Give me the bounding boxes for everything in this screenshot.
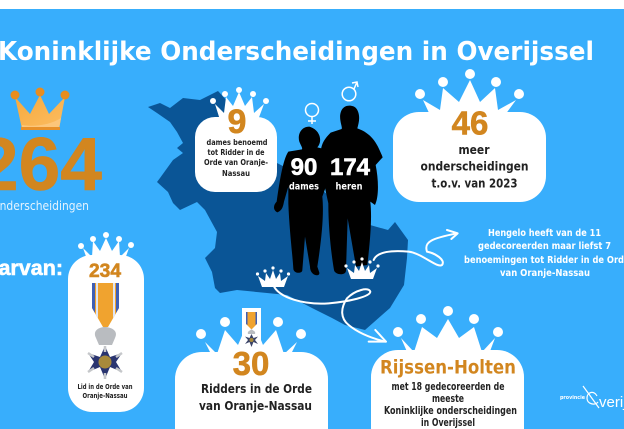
panel: Rijssen-Holten: meeste: [432, 393, 464, 405]
panel: 46 meer: onderscheidingen: [420, 158, 528, 174]
icon: male symbol: [342, 82, 358, 101]
panel: Rijssen-Holten: met 18 gedecoreerden de: [392, 381, 504, 393]
map of Overijssel: [148, 91, 408, 330]
title: Koninklijke Onderscheidingen in Overijssel: [0, 37, 594, 67]
panel: 30 ridders: [175, 308, 328, 429]
stat: 90 dames: dames: [289, 182, 319, 192]
text: Hengelo: [464, 228, 624, 279]
panel: 9 dames: 9: [228, 103, 246, 141]
stat: 90 dames: 90: [291, 154, 317, 181]
text: Hengelo: Hengelo heeft van de 11: [488, 228, 601, 239]
stat: 174 heren: heren: [336, 182, 363, 192]
arrow: Rijssen-Holten: [273, 285, 386, 342]
icon: gold crown: [10, 88, 70, 130]
panel: 46 meer: t.o.v. van 2023: [432, 176, 518, 190]
arrow: Hengelo: [374, 230, 458, 265]
icon: crown Rijssen-Holten location: [256, 266, 290, 287]
panel: 30 ridders: 30: [233, 345, 269, 382]
panel: 9 dames: tot Ridder in de: [208, 148, 264, 157]
logo: provincie Overijssel: provincie: [560, 395, 585, 401]
panel: 9 dames: dames benoemd: [206, 138, 268, 147]
icon: medal: [88, 283, 122, 379]
panel: 46 meer: [393, 69, 546, 202]
stat: 90 dames: [289, 154, 319, 192]
stat: 174 heren: [330, 154, 371, 192]
panel: 9 dames: Orde van Oranje-: [204, 158, 268, 167]
panel: Rijssen-Holten: Koninklijke onderscheidingen: [384, 405, 517, 417]
panel: 9 dames: [195, 87, 277, 192]
icon: crown Hengelo location: [344, 257, 380, 279]
panel: 234 leden: [68, 232, 144, 412]
panel: 46 meer: 46: [452, 104, 488, 142]
panel: 30 ridders: van Oranje-Nassau: [199, 398, 312, 413]
silhouettes: woman and man: [274, 106, 383, 275]
panel: 234 leden: Oranje-Nassau: [82, 392, 128, 400]
text: Hengelo: van Oranje-Nassau: [500, 268, 590, 279]
panel: 9 dames: Nassau: [222, 169, 250, 178]
icon: small medal: [242, 308, 261, 347]
panel: Rijssen-Holten: in Overijssel: [421, 417, 475, 429]
stat: 174 heren: 174: [330, 154, 371, 181]
panel: 30 ridders: Ridders in de Orde: [201, 381, 312, 396]
panel: Rijssen-Holten: [371, 306, 524, 429]
panel: 234 leden: 234: [89, 261, 121, 282]
panel: 234 leden: Lid in de Orde van: [78, 383, 133, 391]
panel: Rijssen-Holten: Rijssen-Holten: [380, 358, 516, 378]
icon: female symbol: [306, 104, 318, 124]
panel: 46 meer: meer: [458, 142, 490, 157]
logo: provincie Overijssel: [560, 386, 624, 411]
